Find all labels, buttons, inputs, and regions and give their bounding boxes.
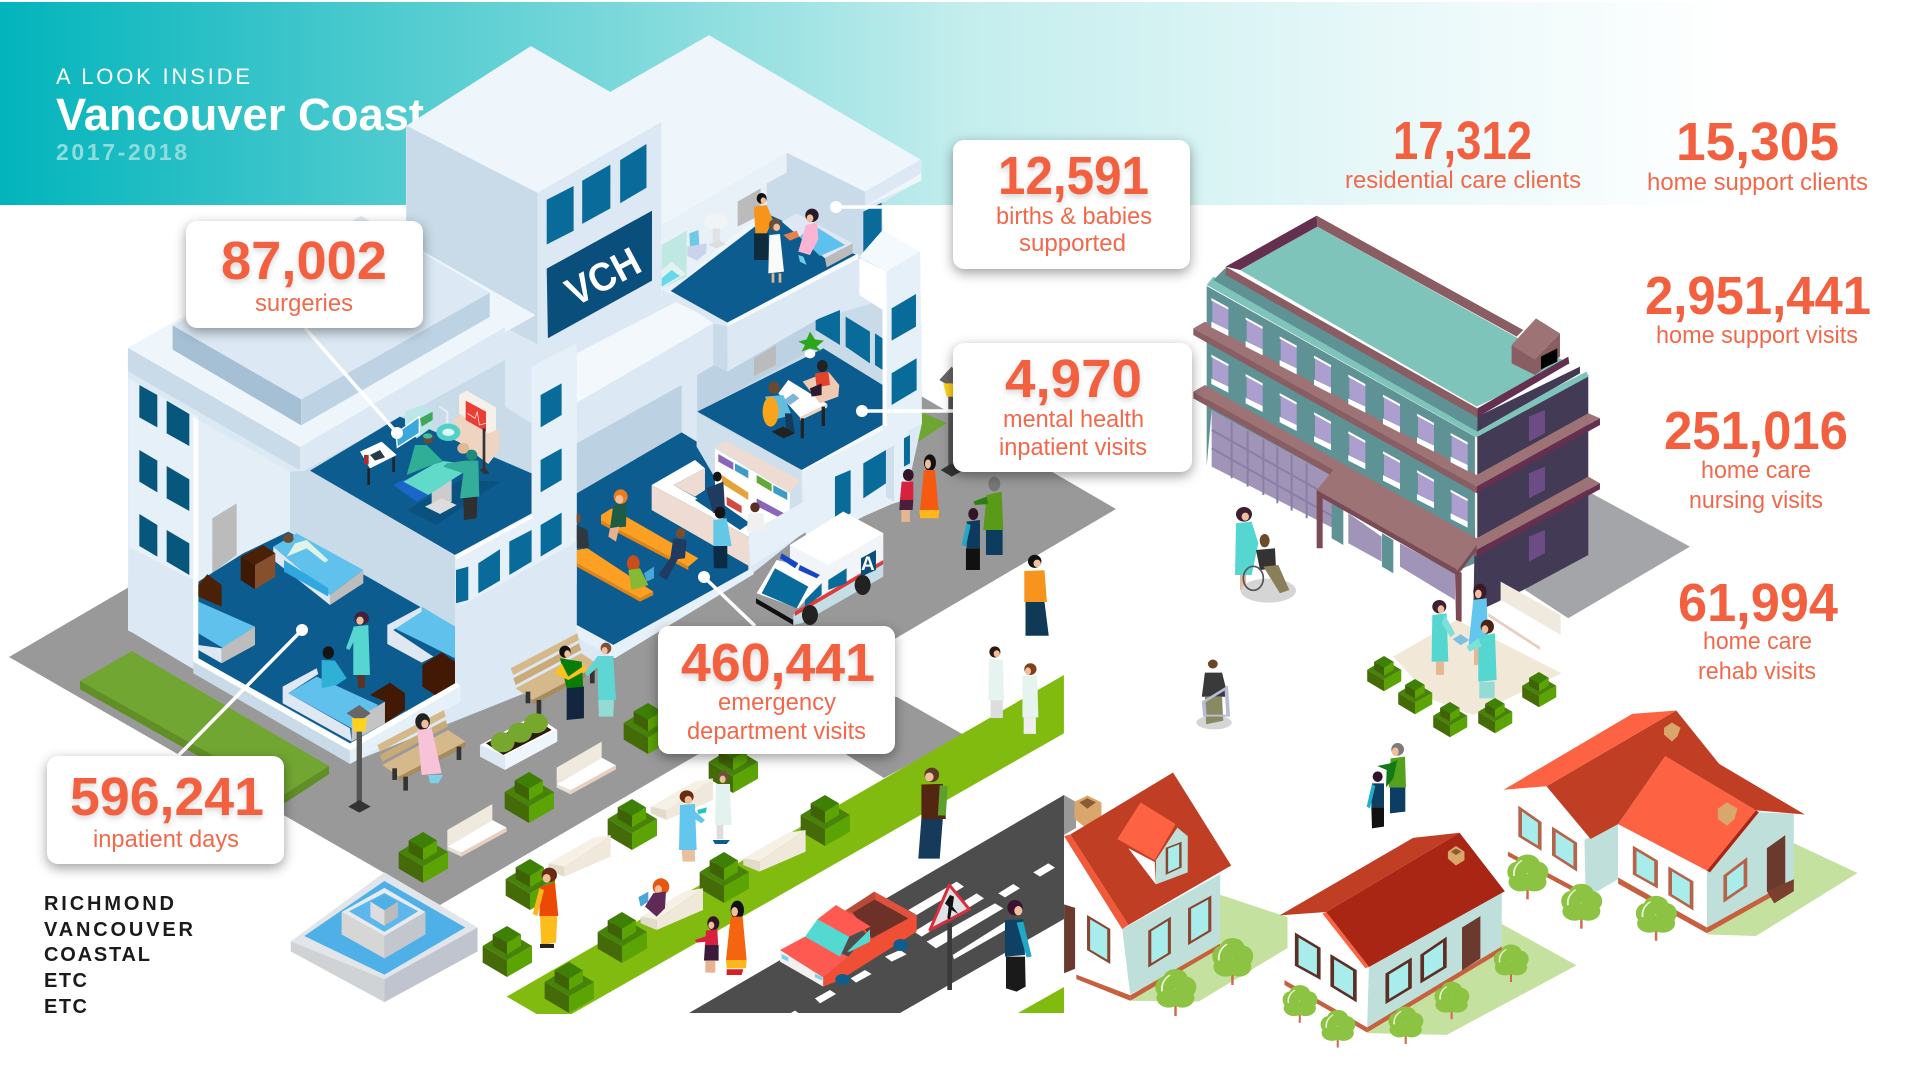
lower left wing roof: [128, 216, 536, 470]
reception desk: [652, 460, 807, 567]
tower windows: [547, 144, 646, 245]
care home bushes: [1367, 656, 1556, 737]
stat: home care rehab visits: [1678, 573, 1838, 685]
operating room back wall: [300, 360, 532, 473]
left pier with windows: [128, 378, 198, 661]
callout: births and babies: 12,591: [998, 146, 1149, 206]
maternity room: [662, 153, 921, 425]
clerk behind desk: [747, 502, 765, 532]
callout: mental health: mental health: [1003, 406, 1144, 433]
mother in orange dress: [726, 901, 747, 975]
doctor in white: [713, 771, 732, 844]
stat: home care rehab visits: rehab visits: [1698, 658, 1816, 685]
bed mid right: [387, 607, 455, 663]
doctor in white: [768, 219, 799, 283]
inner left wall: [198, 420, 290, 582]
woman in orange dress: [919, 454, 939, 518]
man seated far left: [575, 514, 589, 548]
anaesthesia machine: [396, 405, 433, 447]
person in navy at crossing: [1005, 900, 1032, 992]
callout: births and babies: [953, 140, 1190, 269]
ground floor doors: [1332, 503, 1455, 600]
house two: [1280, 833, 1576, 1048]
grandfather and boy: [1367, 743, 1406, 828]
leader line: surgeries: [305, 328, 403, 439]
client on armchair: [803, 360, 839, 403]
surgeon one: [407, 433, 443, 475]
leader line: mental health: [856, 405, 958, 417]
potted plant: [798, 332, 824, 358]
callout: births and babies: supported: [1019, 230, 1126, 257]
man in orange: [754, 193, 773, 260]
stat: home care nursing visits: home care: [1701, 457, 1811, 484]
inpatient room floor: [198, 532, 455, 743]
pillar top: [859, 230, 920, 425]
stat: residential care clients: [1345, 111, 1581, 194]
wheelchair attendant: [1235, 507, 1258, 590]
stat: home support clients: [1647, 112, 1868, 196]
ambulance letter: A: [861, 554, 875, 575]
room front frame: [193, 417, 461, 764]
callout: inpatient days: 596,241: [70, 767, 264, 827]
reception shelf: [715, 442, 800, 533]
orange waiting bench one: [601, 508, 698, 570]
chimneys: [1664, 723, 1737, 826]
patient drape and table: [393, 443, 475, 514]
callout: inpatient days: inpatient days: [93, 826, 239, 853]
ground floor glazing: [1212, 410, 1333, 528]
care worker: [1467, 620, 1497, 698]
wooden bench with woman: [377, 710, 466, 791]
side windows: [1529, 410, 1545, 562]
right column: [883, 280, 922, 443]
bushes: [399, 703, 850, 1013]
stat: home care nursing visits: 251,016: [1664, 401, 1848, 461]
street lamp by entrance: [939, 367, 964, 477]
bedside cabinet small: [198, 574, 222, 607]
callout: emergency department: emergency: [718, 689, 836, 716]
header title block: A LOOK INSIDE: [56, 64, 250, 89]
woman with laptop: [627, 555, 654, 590]
region list: ETC: [44, 970, 87, 992]
visitors by entrance: [899, 454, 1003, 570]
house two windows: [1297, 935, 1445, 1001]
nurse with tablet: [1432, 600, 1455, 675]
stat: home care rehab visits: home care: [1703, 628, 1812, 655]
VCH sign text: VCH: [559, 239, 648, 315]
nurse in teal: [346, 612, 370, 688]
bed front: [283, 668, 385, 742]
grass strip along street: [507, 675, 1064, 1014]
leader line: births: [830, 201, 958, 213]
receptionist in suit: [706, 472, 725, 513]
operating room floor: [310, 417, 532, 555]
sidewalk bottom green corner: [1018, 987, 1064, 1013]
nurse with long hair: [1468, 584, 1488, 665]
seated redhead: [608, 489, 628, 542]
house three windows: [1520, 809, 1745, 908]
inpatient wing: [128, 348, 577, 764]
parapet: [1226, 216, 1569, 417]
walls: [1207, 286, 1475, 572]
house two trees: [1283, 944, 1529, 1048]
header title block: Vancouver Coast: [56, 89, 424, 140]
callout: surgeries: 87,002: [221, 231, 387, 291]
callout: emergency department: department visits: [687, 718, 866, 745]
boy in navy: [962, 508, 980, 570]
house one windows: [1089, 897, 1210, 965]
hospital upper tower: [407, 35, 921, 344]
chimney: [1448, 846, 1464, 865]
two doctors talking: [988, 646, 1038, 734]
heart monitor: [454, 391, 499, 474]
hospital bed: [782, 213, 853, 267]
leader line: inpatient: [177, 624, 308, 757]
region list: [44, 893, 194, 1018]
instrument table: [360, 442, 397, 485]
lawn left of hospital: [80, 651, 329, 804]
plaza: [1393, 620, 1562, 715]
pickup bed: [845, 892, 917, 940]
callout: mental health: inpatient visits: [999, 434, 1147, 461]
care home shadow ground: [1525, 492, 1690, 618]
roof surface: [1240, 227, 1570, 407]
mother on bed: [798, 209, 819, 265]
man in orange shirt: [1024, 555, 1049, 636]
entrance canopy: [1317, 470, 1477, 622]
header title block: 2017-2018: [56, 139, 187, 165]
stat: home care rehab visits: 61,994: [1678, 573, 1838, 633]
woman in orange vest: [533, 868, 558, 948]
chimney: [1074, 796, 1101, 828]
entrance wall: [802, 415, 908, 547]
house three: [1504, 710, 1857, 941]
callout: inpatient days: [47, 756, 284, 864]
house one trees: [1155, 938, 1253, 1016]
planter: [480, 713, 557, 770]
stat: home support visits: home support visits: [1656, 322, 1858, 349]
toilet: [687, 230, 707, 261]
street lamp front: [347, 705, 371, 813]
right column with windows: [455, 348, 577, 687]
region list: ETC: [44, 996, 87, 1018]
white bench by plaza: [1488, 582, 1561, 650]
region list: VANCOUVER: [44, 919, 194, 941]
stat: home support visits: 2,951,441: [1645, 266, 1871, 326]
header title block: [56, 64, 424, 165]
sleeping patient: [283, 534, 328, 563]
nurse in blue: [679, 790, 707, 862]
region list: RICHMOND: [44, 893, 174, 915]
lobby upper wall: [697, 300, 883, 470]
patient sitting on bed: [322, 646, 347, 688]
door: [212, 503, 237, 573]
roof hatch: [1512, 318, 1560, 375]
cabinet right: [422, 652, 455, 695]
callout: surgeries: surgeries: [255, 290, 353, 317]
front windows: [1211, 298, 1468, 528]
sidewalk people: [533, 771, 747, 975]
fountain: [291, 872, 478, 1002]
pedestrian crossing sign: [930, 885, 969, 990]
bed mid left: [198, 602, 255, 663]
stat: home care nursing visits: nursing visits: [1689, 487, 1823, 514]
operating theatre equipment: [360, 391, 500, 525]
visitor at desk: [713, 507, 732, 568]
inpatient room furniture and people: [198, 533, 616, 813]
basin: [704, 214, 728, 248]
benches: [447, 742, 806, 930]
region list: COASTAL: [44, 944, 150, 966]
stat: home care nursing visits: [1664, 401, 1848, 514]
woman on laptop: [638, 878, 669, 917]
girl in red: [695, 916, 719, 973]
lane markings and crosswalk: [790, 863, 1055, 1015]
floor bands: [1193, 322, 1600, 557]
counsellor in chair: [763, 381, 795, 438]
house three trees: [1507, 855, 1677, 941]
red pickup: [780, 892, 917, 987]
header banner: [0, 2, 1921, 205]
street: [689, 795, 1076, 1015]
dormer: [1117, 802, 1188, 884]
wheelchair user: [1243, 534, 1289, 593]
back wall: [290, 471, 455, 627]
stat: home support clients: home support clients: [1647, 169, 1868, 196]
man in suit: [658, 528, 687, 580]
wooden bench with consult: [511, 633, 616, 720]
roof ledges: [1207, 268, 1588, 437]
hospital ground plaza: [9, 396, 1116, 905]
bed top left: [273, 533, 363, 605]
callout: emergency department: [658, 626, 895, 754]
left column windows: [537, 343, 577, 600]
grandfather in green: [973, 477, 1003, 555]
VCH sign board: [547, 211, 652, 338]
surgical lamp: [436, 407, 460, 441]
ambulance: [756, 512, 883, 625]
counselling room floor: [697, 348, 883, 470]
stat: residential care clients: 17,312: [1393, 111, 1532, 171]
house two door: [1462, 916, 1480, 970]
lawn right of hospital: [908, 412, 947, 447]
stat: home support clients: 15,305: [1676, 112, 1839, 172]
house one: [1064, 772, 1288, 1016]
orange waiting bench two: [577, 548, 653, 602]
leader line: emergency: [698, 571, 755, 626]
floor shadow: [407, 480, 500, 525]
man with walker: [1196, 660, 1232, 729]
hospital base silhouette: [128, 35, 922, 763]
cabinet front: [370, 683, 405, 723]
callout: mental health: [953, 343, 1192, 472]
man in brown vest: [918, 768, 948, 859]
callout: surgeries: [186, 221, 423, 328]
house three door: [1767, 835, 1794, 903]
stat: home support visits: [1645, 266, 1871, 349]
shower: [662, 231, 687, 288]
emergency department floor: [577, 432, 748, 645]
consultation table: [778, 380, 827, 438]
central roof and emergency department: [537, 280, 922, 658]
callout: births and babies: births & babies: [996, 203, 1152, 230]
road behind emergency callout: [800, 697, 964, 778]
stat: residential care clients: residential care clients: [1345, 167, 1581, 194]
surgeon two: [443, 450, 479, 520]
tablet: [1453, 634, 1469, 645]
care home building: [1193, 216, 1600, 715]
callout: emergency department: 460,441: [681, 633, 875, 693]
child in red top: [899, 469, 914, 522]
callout: mental health: 4,970: [1005, 349, 1142, 409]
wheelchair shadow: [1241, 579, 1296, 603]
bedside cabinet large: [241, 545, 275, 589]
